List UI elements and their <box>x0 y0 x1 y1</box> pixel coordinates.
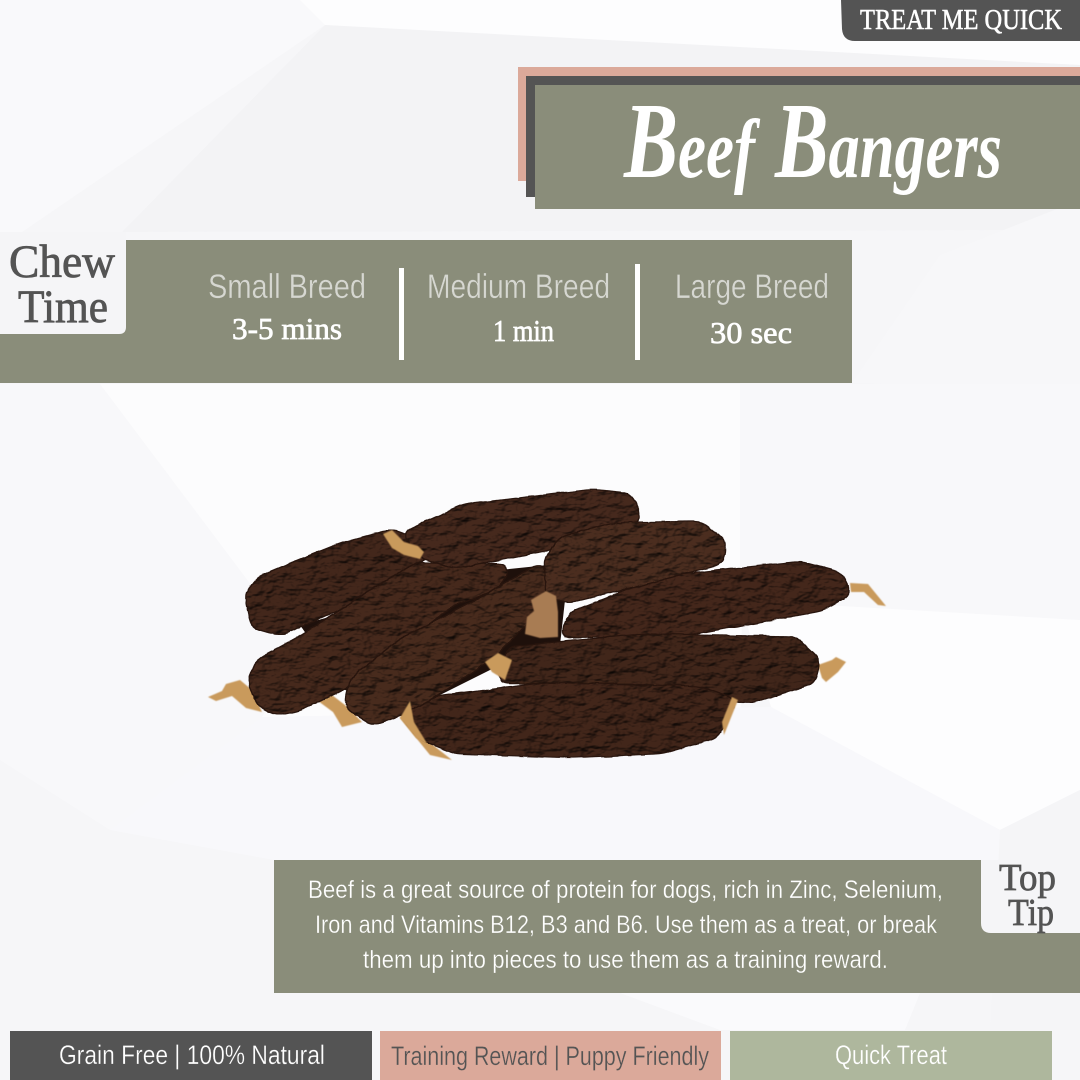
label: Chew Time: Chew <box>9 236 115 288</box>
title: Beef Bangers: Beef <box>623 82 760 201</box>
title banner <box>518 67 1080 209</box>
tip text: Iron and Vitamins B12, B3 and B6. Use them as a treat, or break <box>315 911 937 939</box>
knot: lower right sausage <box>485 653 512 680</box>
tag: Treat Me Quick <box>841 0 1080 41</box>
tip text <box>308 876 943 974</box>
label: Top Tip <box>981 857 1080 934</box>
product illustration: dried beef sausages <box>208 490 886 760</box>
small breed time: Small Breed <box>208 268 366 306</box>
badge: training reward, puppy friendly: Training Reward | Puppy Friendly <box>391 1041 709 1071</box>
title: Beef Bangers <box>623 82 1002 201</box>
badge: training reward, puppy friendly <box>380 1031 721 1080</box>
badge: grain free, natural <box>10 1031 372 1080</box>
knot: top sausage <box>383 530 424 559</box>
badge: grain free, natural: Grain Free | 100% Natural <box>59 1040 325 1070</box>
badge: quick treat: Quick Treat <box>835 1040 947 1070</box>
small breed time <box>208 268 366 346</box>
title: Beef Bangers: Bangers <box>774 82 1002 201</box>
panel: chew time <box>0 232 852 383</box>
large breed time <box>675 268 829 350</box>
knot: front sausage left <box>400 701 428 745</box>
knot: front sausage right <box>722 697 738 735</box>
badge: quick treat <box>730 1031 1052 1080</box>
medium breed time <box>427 268 610 348</box>
label: Top Tip: Top <box>999 857 1056 899</box>
small breed time: 3-5 mins <box>232 311 342 346</box>
medium breed time: Medium Breed <box>427 268 610 306</box>
medium breed time: 1 min <box>493 313 554 348</box>
label: Top Tip: Tip <box>1008 892 1054 934</box>
knot: fold of upper right sausage <box>525 591 558 638</box>
label: Chew Time <box>0 232 126 334</box>
panel: top tip <box>274 857 1080 993</box>
large breed time: Large Breed <box>675 268 829 306</box>
label: Chew Time: Time <box>18 281 108 333</box>
tip text: them up into pieces to use them as a training reward. <box>363 946 888 974</box>
tip text: Beef is a great source of protein for dogs, rich in Zinc, Selenium, <box>308 876 943 904</box>
large breed time: 30 sec <box>710 315 792 350</box>
